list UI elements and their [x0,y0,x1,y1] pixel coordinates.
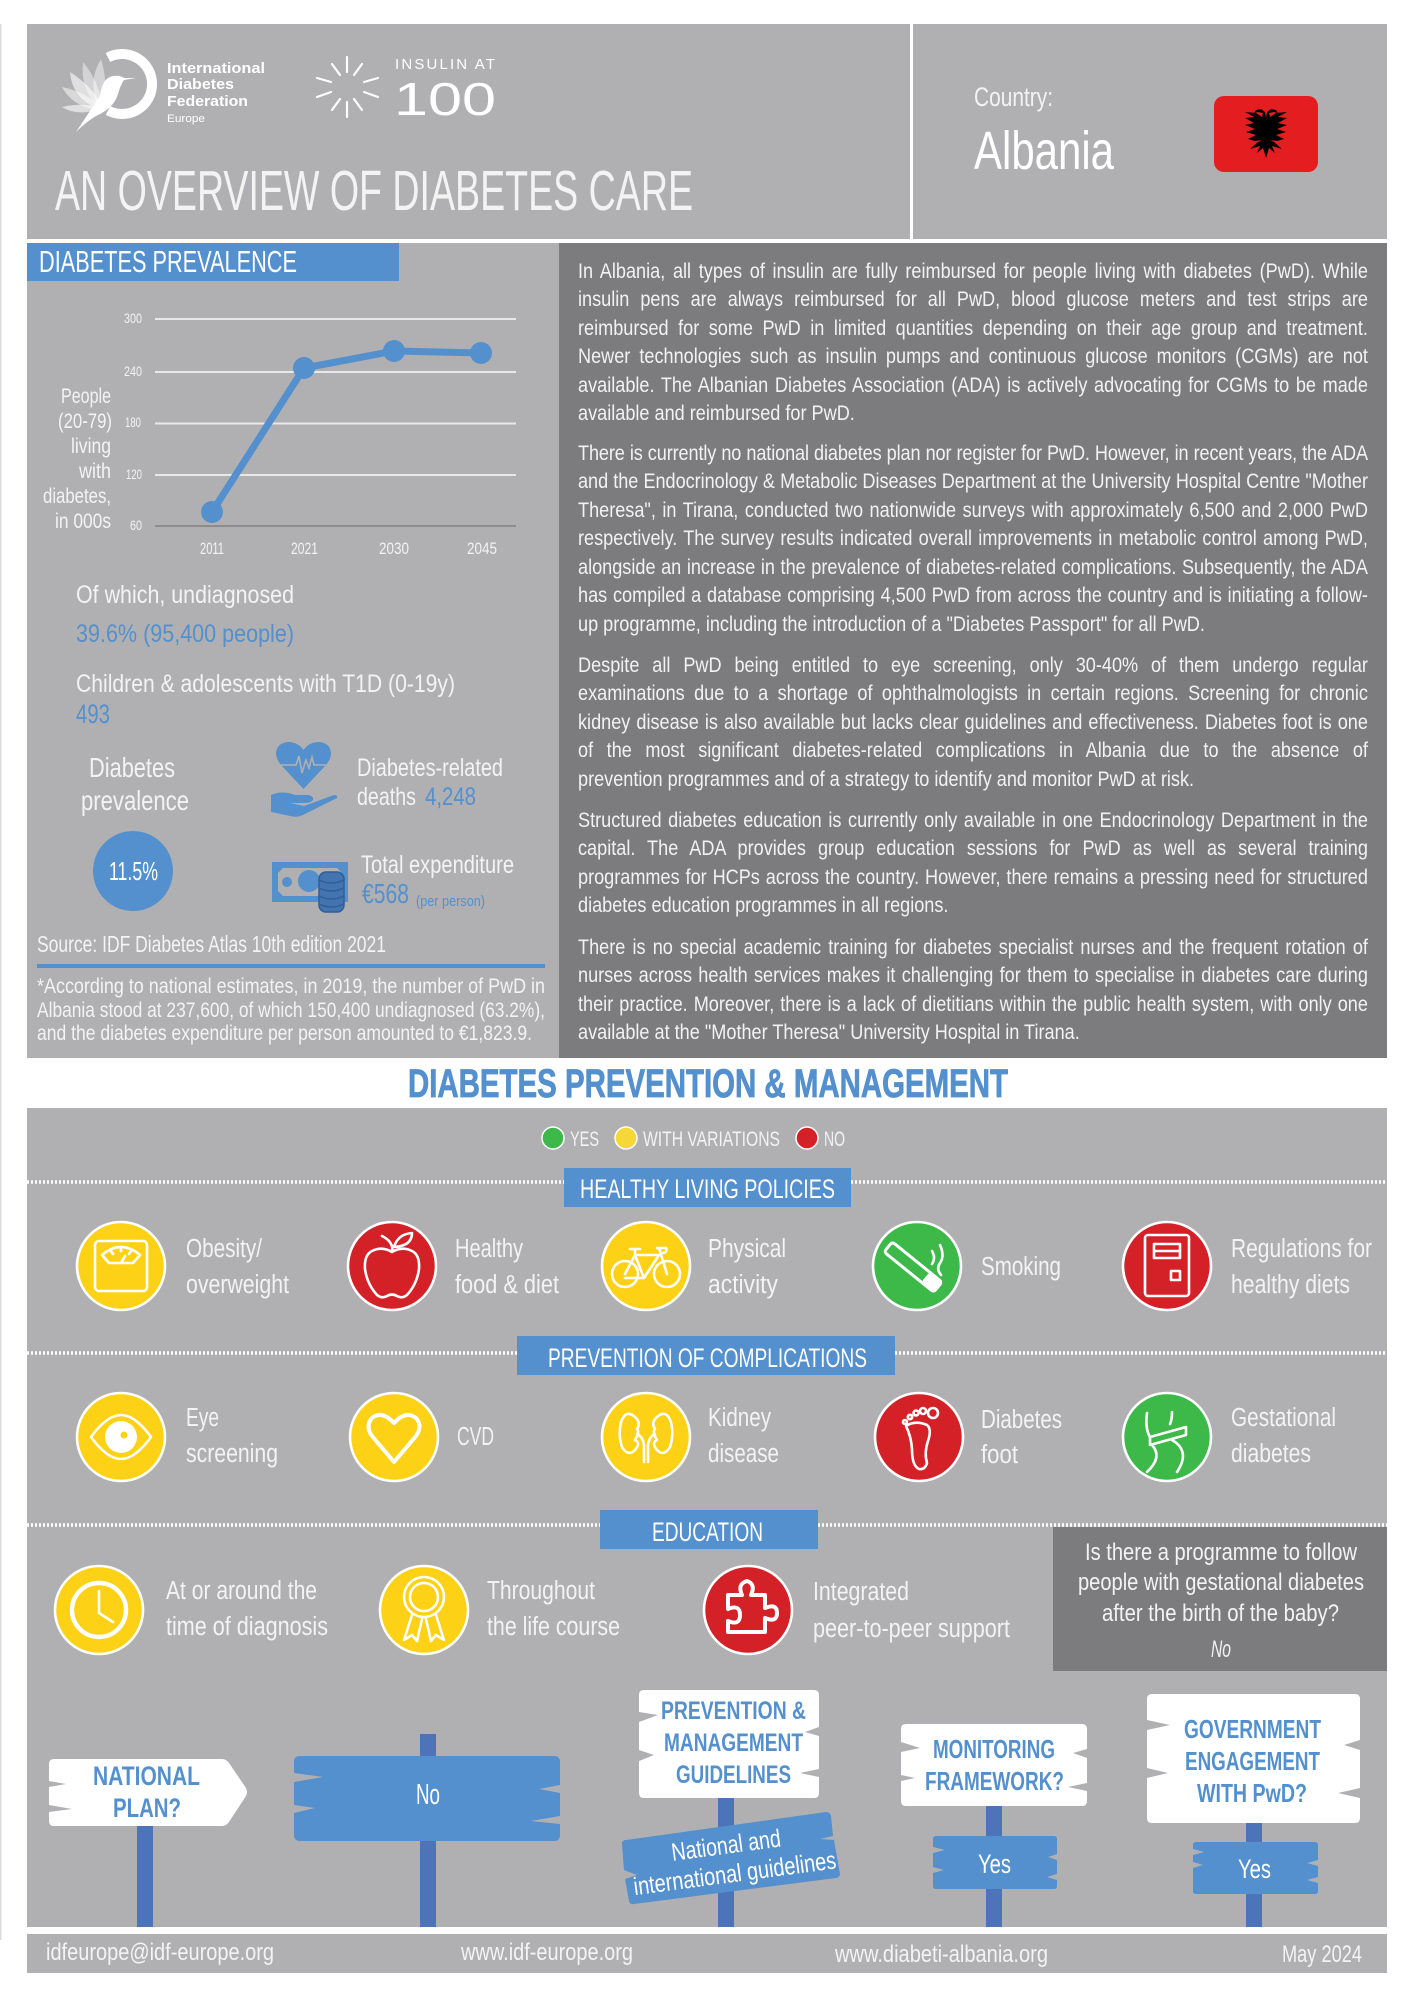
text block: training and workforce: available at the "Mother Theresa" University Hospital in Tirana. [578,1021,1080,1044]
heading: diabetes prevention and management: DIABETES PREVENTION & MANAGEMENT [408,1062,1008,1106]
logo: Insulin at 100: INSULIN AT [395,56,495,73]
footnote: Albania stood at 237,600, of which 150,400 undiagnosed (63.2%), [37,998,545,1022]
callout: gestational follow-up: Is there a programme to follow [1085,1539,1357,1566]
signpost: monitoring framework [901,1724,1087,1927]
text block: training and workforce: nurses across health services makes it challenging for them to specialise in diabetes care during [578,964,1368,987]
signpost: guidelines [639,1690,819,1927]
chart axis label: living [71,435,111,458]
logo: International Diabetes Federation: Diabetes [167,76,234,93]
signpost: guidelines answer: international guidelines [632,1846,838,1901]
text block: screening for complications: Despite all PwD being entitled to eye screening, only 30-40% of them undergo regular [578,654,1368,677]
label: regulations [1231,1235,1372,1299]
section label: healthy living policies [564,1168,851,1207]
text block: training and workforce: their practice. Moreover, there is a lack of dietitians within the public health system, with only one [578,993,1368,1016]
stat: deaths [357,754,503,811]
signpost: government engagement [1147,1694,1360,1927]
stat: children with T1D [76,670,455,729]
label: healthy food [455,1235,559,1299]
logo: International Diabetes Federation: Federation [167,93,248,110]
text block: screening for complications [578,654,1368,791]
label: obesity: Obesity/ [186,1235,263,1263]
signpost: national plan answer: No [416,1779,440,1811]
footer [27,1934,1387,1973]
stat: undiagnosed [76,581,294,648]
label: physical activity: Physical [708,1235,786,1263]
label: eye screening: Eye [186,1404,219,1432]
label: obesity [186,1235,289,1299]
signpost: monitoring answer: Yes [978,1849,1011,1879]
signpost: guidelines: GUIDELINES [676,1761,791,1789]
icon: Albanian flag [1214,96,1318,172]
label: healthy food: Healthy [455,1235,523,1263]
label: eye screening [186,1404,278,1468]
footnote [37,974,545,1045]
section label: education [600,1510,818,1549]
label: kidney disease [708,1404,779,1468]
label: kidney disease: Kidney [708,1404,771,1432]
label: at diagnosis: time of diagnosis [166,1613,328,1641]
label: gestational diabetes: Gestational [1231,1404,1336,1432]
text block: diabetes education: programmes for HCPs across the country. However, there remains a pressing need for structured [578,866,1368,889]
title: AN OVERVIEW OF DIABETES CARE [55,159,693,223]
footer: May 2024 [1282,1941,1362,1968]
label: at diagnosis: At or around the [166,1577,317,1605]
stat: deaths: deaths [357,783,416,811]
signpost: government engagement: GOVERNMENT [1184,1714,1321,1744]
logo: International Diabetes Federation: International [167,60,265,77]
signpost: monitoring answer [933,1836,1057,1889]
label: life course: the life course [487,1613,620,1641]
logo: International Diabetes Federation [62,54,265,132]
icon: life course rosette [380,1566,468,1654]
heading: diabetes prevalence: DIABETES PREVALENCE [39,244,297,279]
stat: total expenditure [361,851,514,910]
stat: deaths: Diabetes-related [357,754,503,782]
stat: diabetes prevalence: prevalence [81,785,189,816]
text block: diabetes education: diabetes education programmes in all regions. [578,894,948,917]
panel: country narrative background [559,243,1387,1058]
stat: children with T1D: 493 [76,699,110,729]
line chart: 120 [126,466,142,482]
text block: training and workforce [578,936,1368,1044]
label: regulations: healthy diets [1231,1271,1350,1299]
text block: screening for complications: of the most significant diabetes-related complications in Albania due to the absence of [578,739,1368,762]
label: peer support: Integrated [813,1578,909,1606]
header band [27,24,1387,239]
panel: diabetes prevalence [27,243,559,1058]
label: smoking: Smoking [981,1253,1061,1281]
icon: obesity [77,1222,165,1310]
signpost: guidelines: PREVENTION & [661,1697,806,1725]
label: physical activity [708,1235,786,1299]
label: CVD: CVD [457,1423,494,1451]
line chart: 300 [124,310,142,326]
label: diabetes foot [981,1406,1062,1469]
icon: smoking [873,1222,961,1310]
text block: national plan and surveys: up programme, including the introduction of a "Diabetes Passport" for all PwD. [578,613,1205,636]
stat: undiagnosed: 39.6% (95,400 people) [76,620,294,648]
callout: gestational follow-up [1053,1527,1387,1671]
text block: diabetes education: Structured diabetes education is currently only available in one Endocrinology Department in the [578,809,1368,832]
text block: diabetes education: capital. The ADA provides group education sessions for PwD as well as several training [578,837,1368,860]
icon: regulations [1123,1222,1211,1310]
icon: eye screening [77,1393,165,1481]
text block: screening for complications: examinations due to a shortage of ophthalmologists in certain regions. Screening for chronic [578,682,1368,705]
label: diabetes foot: foot [981,1441,1018,1469]
callout: gestational follow-up: after the birth of the baby? [1102,1600,1339,1627]
chart axis label [43,385,112,533]
legend: WITH VARIATIONS [643,1128,780,1151]
chart axis label: in 000s [55,510,111,533]
signpost: national plan answer [294,1734,560,1927]
icon: physical activity [602,1222,690,1310]
signpost: national plan: NATIONAL [93,1761,200,1791]
legend: YES [570,1128,599,1151]
line chart: 180 [125,414,141,430]
footer: idfeurope@idf-europe.org [46,1939,274,1966]
stat: deaths: 4,248 [425,783,476,811]
legend [542,1127,845,1151]
label: life course [487,1577,620,1641]
label: kidney disease: disease [708,1440,779,1468]
label: at diagnosis [166,1577,328,1641]
signpost: guidelines: MANAGEMENT [664,1729,803,1757]
text block: insulin and technology reimbursement: Newer technologies such as insulin pumps and continuous glucose monitors (CGMs) are not [578,345,1368,368]
section label: education: EDUCATION [652,1517,763,1547]
signpost: government answer [1193,1842,1318,1894]
signpost: monitoring framework: FRAMEWORK? [925,1766,1064,1796]
label: obesity: overweight [186,1271,289,1299]
text block: insulin and technology reimbursement: available. The Albanian Diabetes Association (ADA) is actively advocating for CGMs to be made [578,374,1368,397]
text block: insulin and technology reimbursement: insulin pens are always reimbursed for all PwD, blood glucose meters and test strips are [578,288,1368,311]
logo: International Diabetes Federation: Europe [167,113,205,125]
section label: healthy living policies: HEALTHY LIVING POLICIES [580,1174,835,1204]
signpost: government engagement: ENGAGEMENT [1185,1746,1320,1776]
label: gestational diabetes [1231,1404,1336,1468]
label: healthy food: food & diet [455,1271,559,1299]
stat: total expenditure: €568 [362,878,409,909]
section label: prevention of complications: PREVENTION OF COMPLICATIONS [548,1343,867,1373]
callout: gestational follow-up: No [1211,1636,1231,1663]
line chart: 2030 [379,539,409,558]
footer: www.idf-europe.org [460,1939,633,1966]
line chart: 2011 [200,539,224,558]
label: life course: Throughout [487,1577,595,1605]
chart axis label: with [78,460,111,483]
text block: national plan and surveys [578,442,1368,636]
footnote: *According to national estimates, in 2019, the number of PwD in [37,974,545,998]
text block: insulin and technology reimbursement: available and reimbursed for PwD. [578,402,855,425]
chart axis label: People [61,385,111,408]
line chart: 2021 [291,539,318,558]
line chart: 240 [124,363,142,379]
icon: gestational diabetes [1123,1393,1211,1481]
signpost: national plan [49,1759,247,1927]
stat: children with T1D: Children & adolescents with T1D (0-19y) [76,670,455,698]
logo: Insulin at 100: 100 [394,73,496,125]
text block: insulin and technology reimbursement: In Albania, all types of insulin are fully reimbursed for people living with diabetes (PwD). While [578,260,1368,283]
icon: kidney disease [602,1393,690,1481]
icon: healthy food [348,1222,436,1310]
signpost: government engagement: WITH PwD? [1197,1778,1307,1808]
logo: Insulin at 100 [317,56,496,125]
label: peer support [813,1578,1010,1643]
label: peer support: peer-to-peer support [813,1615,1010,1643]
country name: Albania [974,121,1115,181]
label: physical activity: activity [708,1271,778,1299]
legend: NO [824,1128,845,1151]
line chart: 60 [130,517,142,533]
signpost: monitoring framework: MONITORING [933,1734,1055,1764]
label: gestational diabetes: diabetes [1231,1440,1311,1468]
label: eye screening: screening [186,1440,278,1468]
icon: at diagnosis clock [55,1566,143,1654]
footer: www.diabeti-albania.org [834,1941,1048,1968]
text block: diabetes education [578,809,1368,917]
stat: total expenditure: (per person) [416,893,485,910]
stat: undiagnosed: Of which, undiagnosed [76,581,294,609]
icon: money and coins [272,862,348,912]
line chart: 2045 [467,539,497,558]
text block: national plan and surveys: and the Endocrinology & Metabolic Diseases Department at the University Hospital Centre "Mother [578,470,1368,493]
stat: diabetes prevalence [81,752,189,911]
icon: heart in hand [271,742,337,817]
chart axis label: diabetes, [43,485,111,508]
signpost: guidelines answer [622,1812,840,1904]
text block: national plan and surveys: There is currently no national diabetes plan nor register for PwD. However, in recent years, the ADA [578,442,1368,465]
icon: CVD heart [350,1393,438,1481]
signpost: guidelines answer: National and [670,1825,782,1867]
text block: screening for complications: prevention programmes and of a strategy to identify and monitor PwD at risk. [578,768,1194,791]
line chart [124,310,516,558]
signpost: national plan: PLAN? [113,1793,181,1823]
stat: diabetes prevalence: 11.5% [109,856,158,886]
country label: Country: [974,82,1053,112]
text block: insulin and technology reimbursement: reimbursed for some PwD in limited quantities depending on their age group and treatment. [578,317,1368,340]
label: diabetes foot: Diabetes [981,1406,1062,1434]
text block: national plan and surveys: respectively. The survey results indicated overall improvements in metabolic control among PwD, [578,527,1368,550]
panel: prevention and management [27,1108,1387,1927]
stat: diabetes prevalence: Diabetes [89,752,175,783]
icon: diabetes foot [875,1393,963,1481]
text block: screening for complications: kidney disease is also available but lacks clear guidelines and effectiveness. Diabetes foot is one [578,711,1368,734]
signpost: government answer: Yes [1238,1854,1271,1884]
label: regulations: Regulations for [1231,1235,1372,1263]
source: Source: IDF Diabetes Atlas 10th edition 2021 [37,931,386,957]
text block: national plan and surveys: Theresa", in Tirana, conducted two nationwide surveys with approximately 6,500 and 2,000 PwD [578,499,1368,522]
stat: total expenditure: Total expenditure [361,851,514,879]
text block: national plan and surveys: alongside an increase in the prevalence of diabetes-related complications. Subsequently, the ADA [578,556,1368,579]
text block: training and workforce: There is no special academic training for diabetes specialist nurses and the frequent rotation of [578,936,1368,959]
footnote: and the diabetes expenditure per person amounted to €1,823.9. [37,1021,532,1045]
section label: prevention of complications [517,1336,895,1375]
text block: national plan and surveys: has compiled a database comprising 4,500 PwD from across the country and is initiating a follow- [578,584,1368,607]
chart axis label: (20-79) [58,410,112,433]
icon: peer support puzzle [704,1566,792,1654]
text block: insulin and technology reimbursement [578,260,1368,425]
